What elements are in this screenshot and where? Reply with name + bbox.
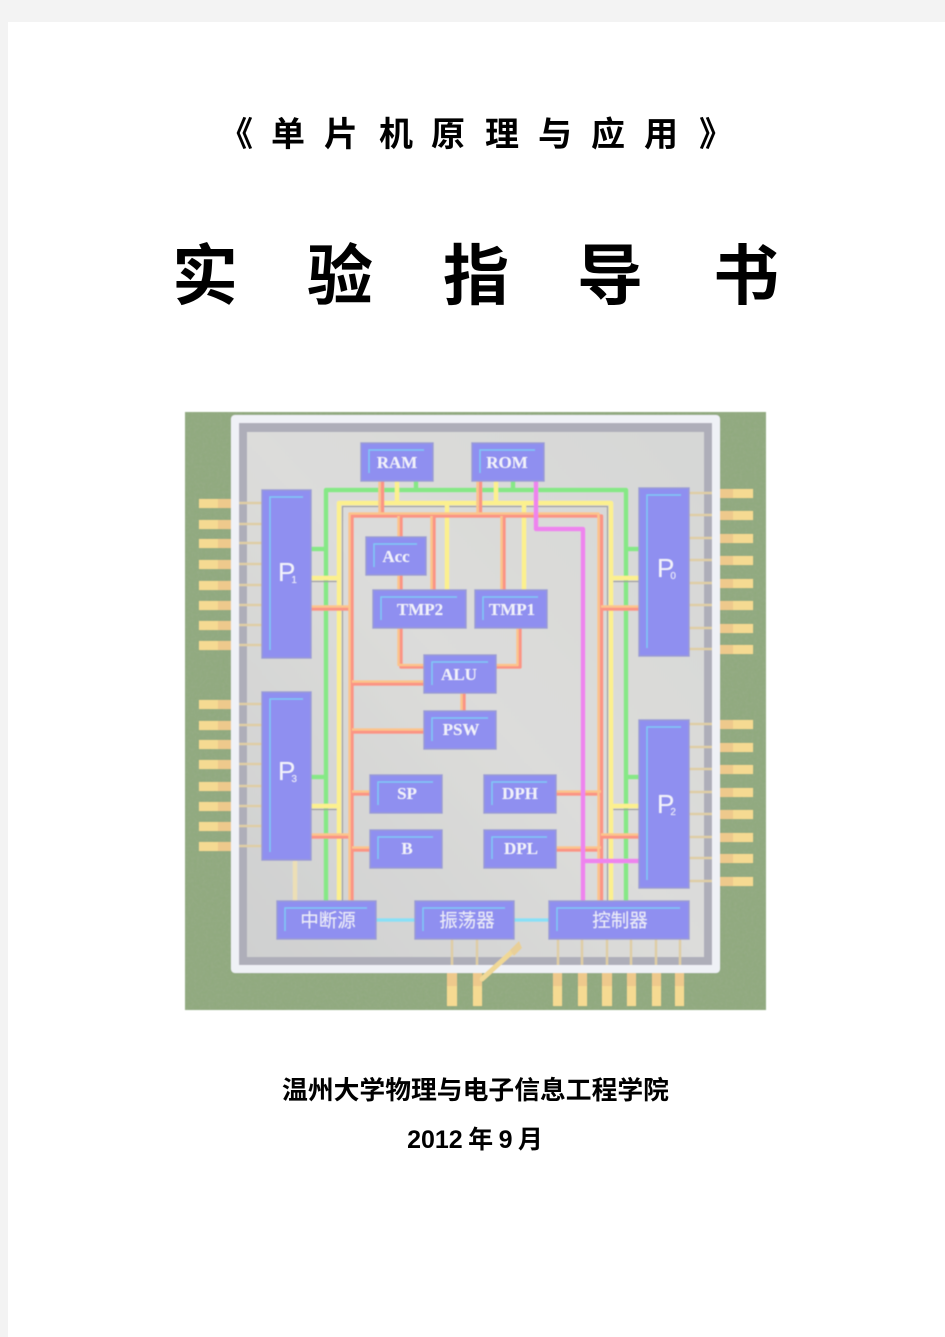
register TMP2: TMP2 — [397, 600, 443, 619]
chip die surface — [247, 432, 704, 957]
main title: 实验指导书 — [172, 239, 779, 313]
register RAM — [361, 443, 433, 481]
green bus — [311, 481, 639, 901]
port P0: 0 — [670, 571, 676, 582]
yellow bus — [311, 481, 639, 901]
port P0: P — [657, 553, 674, 583]
left pin leads — [239, 503, 262, 846]
register DPL — [484, 830, 556, 868]
register ROM — [472, 443, 544, 481]
register ROM: ROM — [486, 453, 528, 472]
institution name: 温州大学物理与电子信息工程学院 — [282, 1076, 669, 1105]
orange bus highlight — [311, 481, 639, 901]
port P2: P — [657, 789, 674, 819]
port P1 — [262, 490, 311, 658]
chip white frame — [231, 415, 720, 973]
left pads — [199, 499, 231, 851]
crystal connector — [482, 949, 515, 979]
register ALU — [424, 655, 496, 693]
port P3: 3 — [291, 774, 297, 785]
oscillator block — [415, 901, 514, 939]
interrupt source block — [277, 901, 376, 939]
crystal head — [510, 941, 522, 956]
register TMP1 — [475, 590, 547, 628]
red bus — [311, 481, 639, 901]
port P3: P — [278, 756, 295, 786]
register RAM: RAM — [377, 453, 417, 472]
register SP — [370, 775, 442, 813]
cyan clock lines — [376, 918, 549, 922]
register TMP2 — [373, 590, 466, 628]
chip architecture diagram — [185, 412, 766, 1010]
port P1: 1 — [291, 575, 297, 586]
register B: B — [401, 839, 413, 858]
register SP: SP — [397, 784, 417, 803]
date: 2012 年 9 月 — [407, 1126, 543, 1154]
bottom pads — [447, 973, 684, 1006]
chip grey bevel — [239, 423, 712, 965]
port P0 — [639, 488, 689, 656]
interrupt source block: 中断源 — [300, 910, 356, 931]
port P1: P — [278, 557, 295, 587]
board texture — [185, 412, 766, 1010]
controller block — [549, 901, 689, 939]
signal buses — [295, 481, 639, 920]
register B — [370, 830, 442, 868]
port P3 — [262, 692, 311, 860]
P3 interrupt line — [293, 861, 297, 901]
course title: 《单片机原理与应用》 — [219, 116, 733, 154]
right pin leads — [689, 493, 712, 881]
controller block: 控制器 — [592, 910, 648, 931]
register PSW — [424, 711, 496, 749]
register TMP1: TMP1 — [489, 600, 535, 619]
oscillator block: 振荡器 — [439, 910, 495, 931]
register Acc: Acc — [382, 547, 410, 566]
magenta control line — [536, 481, 639, 901]
register DPL: DPL — [504, 839, 538, 858]
register DPH — [484, 775, 556, 813]
port P2: 2 — [670, 807, 676, 818]
bus shadow line — [311, 506, 639, 901]
pins and pads — [199, 489, 753, 1006]
register Acc — [366, 537, 426, 575]
register DPH: DPH — [502, 784, 538, 803]
port P2 — [639, 720, 689, 888]
register PSW: PSW — [443, 720, 479, 739]
register ALU: ALU — [441, 665, 477, 684]
right pads — [720, 489, 753, 886]
bottom pin leads — [452, 939, 680, 965]
circuit board background — [185, 412, 766, 1010]
